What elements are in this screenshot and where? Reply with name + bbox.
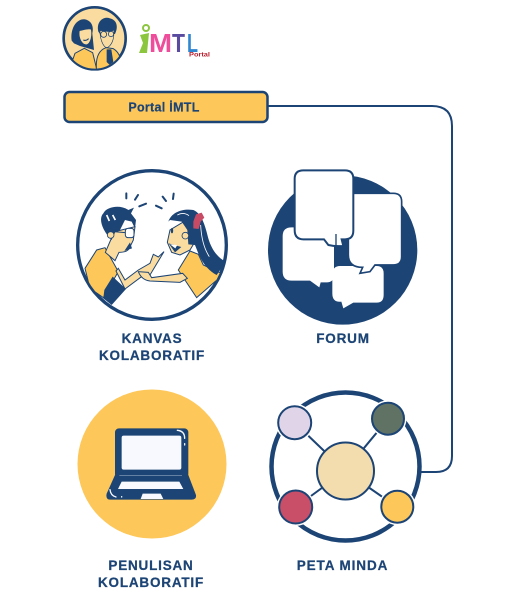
label: peta minda: PETA MINDA [297,558,388,573]
icon: student avatars [64,7,126,72]
button: Portal iMTL: Portal İMTL [128,100,200,114]
logo: iMTL Portal: M [149,28,172,58]
label: penulisan kolaboratif [98,558,204,590]
label: penulisan kolaboratif: KOLABORATIF [98,575,204,590]
logo: iMTL Portal: Portal [189,52,210,58]
label: kanvas kolaboratif [99,331,205,363]
button: Portal iMTL [64,92,268,122]
icon: forum speech bubbles [268,170,417,325]
logo: iMTL Portal [139,25,210,58]
icon: peta minda [272,392,420,540]
icon: laptop [78,390,226,538]
label: penulisan kolaboratif: PENULISAN [108,558,194,573]
icon: kanvas kolaboratif [78,171,226,319]
logo: iMTL Portal: T [172,28,185,58]
label: kanvas kolaboratif: KOLABORATIF [99,348,205,363]
label: kanvas kolaboratif: KANVAS [122,331,182,346]
logo: iMTL Portal: L [187,28,198,58]
label: forum: FORUM [316,331,370,346]
connector line [268,106,452,472]
